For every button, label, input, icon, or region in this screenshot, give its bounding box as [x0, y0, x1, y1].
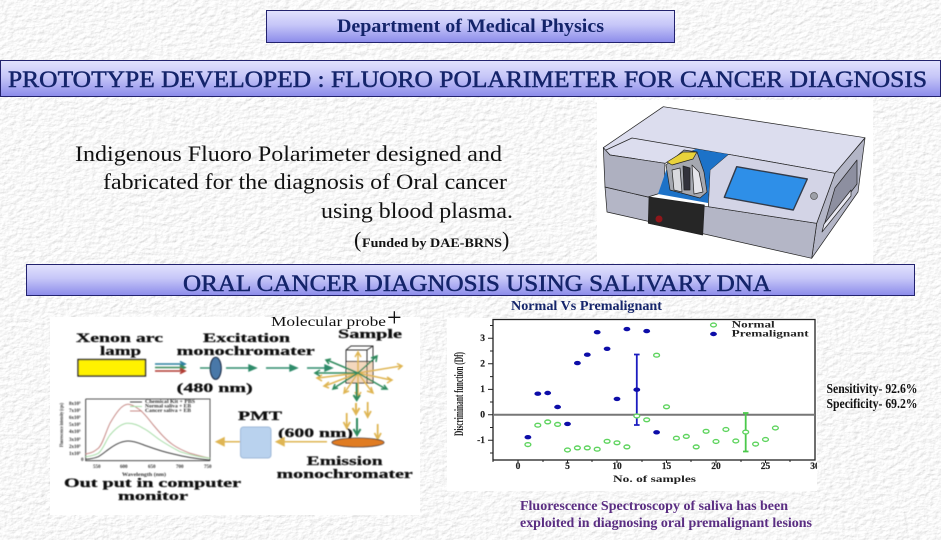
chart legend [710, 320, 809, 338]
diagram labels: Excitation [203, 331, 290, 345]
chart: fluorescence spectrum output: 5x10⁵ [69, 422, 81, 428]
chart: fluorescence spectrum output: Wavelength (nm) [122, 473, 166, 478]
arrows: to detector and monitor [216, 438, 327, 446]
device optics [666, 150, 707, 198]
text block: prototype description: Funded by DAE-BRNS [362, 235, 502, 250]
chart: fluorescence spectrum output: Cancer saliva + EB [145, 409, 192, 414]
chart x axis labels: 5 [565, 462, 570, 472]
text block: prototype description [75, 141, 513, 252]
device top face [603, 107, 865, 173]
chart axes [488, 320, 815, 463]
text block: prototype description: fabricated for the diagnosis of Oral cancer [103, 169, 508, 194]
icon: sample cuvette [346, 346, 373, 383]
chart: fluorescence spectrum output: 4x10⁵ [69, 429, 81, 435]
chart y axis title: Discriminant function (Df) [451, 352, 466, 436]
panel: fluoro polarimeter device illustration [597, 100, 873, 263]
heading: department banner [266, 10, 674, 42]
chart x axis labels: 25 [761, 462, 770, 472]
device front lower face [605, 187, 817, 258]
chart: fluorescence spectrum output: 750 [204, 465, 212, 470]
device black panel [648, 197, 704, 235]
device upper-left face [603, 148, 665, 197]
diagram labels [64, 327, 413, 503]
chart legend: Premalignant [732, 328, 809, 338]
caption: fluorescence spectroscopy note [520, 498, 812, 530]
chart: fluorescence spectrum output: Fluorescence intensity (cps) [60, 403, 65, 447]
diagram labels: lamp [100, 344, 141, 358]
diagram labels: monochromater [277, 467, 413, 481]
chart: fluorescence spectrum output: 1x10⁵ [69, 451, 81, 457]
chart y axis labels: 3 [480, 334, 485, 344]
heading: prototype banner: PROTOTYPE DEVELOPED : FLUORO POLARIMETER FOR CANCER DIAGNOSIS [8, 67, 927, 92]
chart: fluorescence spectrum output [60, 399, 212, 478]
panel: discriminant function scatter chart [447, 318, 820, 491]
diagram labels: Out put in computer [64, 476, 242, 490]
diagram labels: Emission [307, 454, 383, 468]
diagram labels: (480 nm) [177, 381, 253, 395]
chart: fluorescence spectrum output: 2x10⁵ [69, 444, 81, 450]
chart x axis labels: 15 [662, 462, 672, 472]
device yellow part [667, 152, 697, 165]
chart: fluorescence spectrum output: 7x10⁵ [69, 408, 81, 414]
heading: oral cancer banner: ORAL CANCER DIAGNOSIS USING SALIVARY DNA [183, 271, 771, 296]
diagram labels: (600 nm) [278, 426, 353, 440]
chart: fluorescence spectrum output: 600 [120, 465, 128, 470]
text block: prototype description: using blood plasma. [321, 198, 513, 223]
chart error bar: premalignant [634, 354, 640, 425]
text block: prototype description: Indigenous Fluoro Polarimeter designed and [75, 141, 502, 166]
arrows: scattered light [315, 352, 402, 397]
callout: sensitivity and specificity: Sensitivity- 92.6% [826, 381, 918, 396]
label: molecular probe [271, 303, 402, 332]
diagram labels: Xenon arc [76, 331, 164, 345]
chart: fluorescence spectrum output: 550 [93, 465, 101, 470]
device lid edge [606, 138, 697, 150]
device console [708, 154, 835, 223]
chart: fluorescence spectrum output: 8x10⁵ [69, 401, 81, 407]
chart series: normal [525, 353, 778, 452]
chart y axis labels: 2 [480, 360, 485, 370]
chart series: premalignant [524, 327, 660, 439]
handle recess [823, 160, 857, 229]
icon: PMT [240, 427, 271, 458]
heading: prototype banner [0, 60, 940, 96]
device right face [812, 138, 865, 258]
chart x axis labels: 30 [810, 462, 820, 472]
chart y axis labels: 0 [480, 410, 485, 420]
text block: prototype description: ( [354, 227, 361, 252]
icon: xenon lamp [78, 360, 146, 376]
icon: excitation lens [210, 357, 221, 379]
device power light [656, 216, 662, 222]
chart y axis labels: -1 [477, 436, 485, 446]
chart x axis labels: 10 [612, 462, 622, 472]
icon: emission monochromator [332, 438, 384, 447]
chart: fluorescence spectrum output: 700 [176, 465, 184, 470]
device blue cavity [658, 149, 728, 203]
arrows: excitation path [200, 365, 332, 371]
chart: fluorescence spectrum output: Normal saliva + EB [145, 404, 192, 410]
diagram labels: monitor [118, 489, 189, 503]
heading: oral cancer banner [26, 264, 914, 296]
chart x axis labels: 20 [711, 462, 721, 472]
label: molecular probe: Molecular probe [271, 314, 386, 329]
device screen [724, 167, 807, 210]
chart: fluorescence spectrum output: 3x10⁵ [69, 437, 81, 443]
device button [810, 192, 818, 200]
chart legend: Normal [732, 320, 775, 330]
label: normal vs premalignant: Normal Vs Premalignant [511, 298, 663, 313]
chart: fluorescence spectrum output: Chemical Kit + PBS [145, 400, 195, 405]
chart error bar: normal [743, 413, 748, 452]
chart: fluorescence spectrum output: 0 [81, 458, 84, 463]
callout: sensitivity and specificity: Specificity- 69.2% [826, 396, 918, 411]
diagram labels: Sample [338, 327, 403, 341]
chart x axis labels [516, 462, 817, 470]
panel: fluorescence spectroscopy setup diagram [50, 317, 420, 515]
chart y axis labels [477, 334, 485, 446]
chart zero line [493, 414, 815, 416]
diagram labels: monochromater [177, 344, 315, 358]
chart x axis title: No. of samples [613, 474, 697, 484]
arrows: emission path [344, 383, 381, 439]
diagram labels: PMT [238, 409, 283, 423]
heading: department banner: Department of Medical Physics [337, 17, 604, 37]
chart x axis labels: 0 [516, 462, 521, 472]
caption: fluorescence spectroscopy note: exploited in diagnosing oral premalignant lesions [520, 515, 812, 530]
chart y axis labels: 1 [480, 385, 485, 395]
chart: fluorescence spectrum output: 650 [148, 465, 156, 470]
arrows: lamp beams [155, 362, 185, 374]
caption: fluorescence spectroscopy note: Fluorescence Spectroscopy of saliva has been [520, 498, 789, 513]
label: molecular probe: + [387, 303, 402, 332]
callout: sensitivity and specificity [826, 381, 918, 411]
chart: fluorescence spectrum output: 6x10⁵ [69, 415, 81, 421]
text block: prototype description: ) [502, 227, 509, 252]
